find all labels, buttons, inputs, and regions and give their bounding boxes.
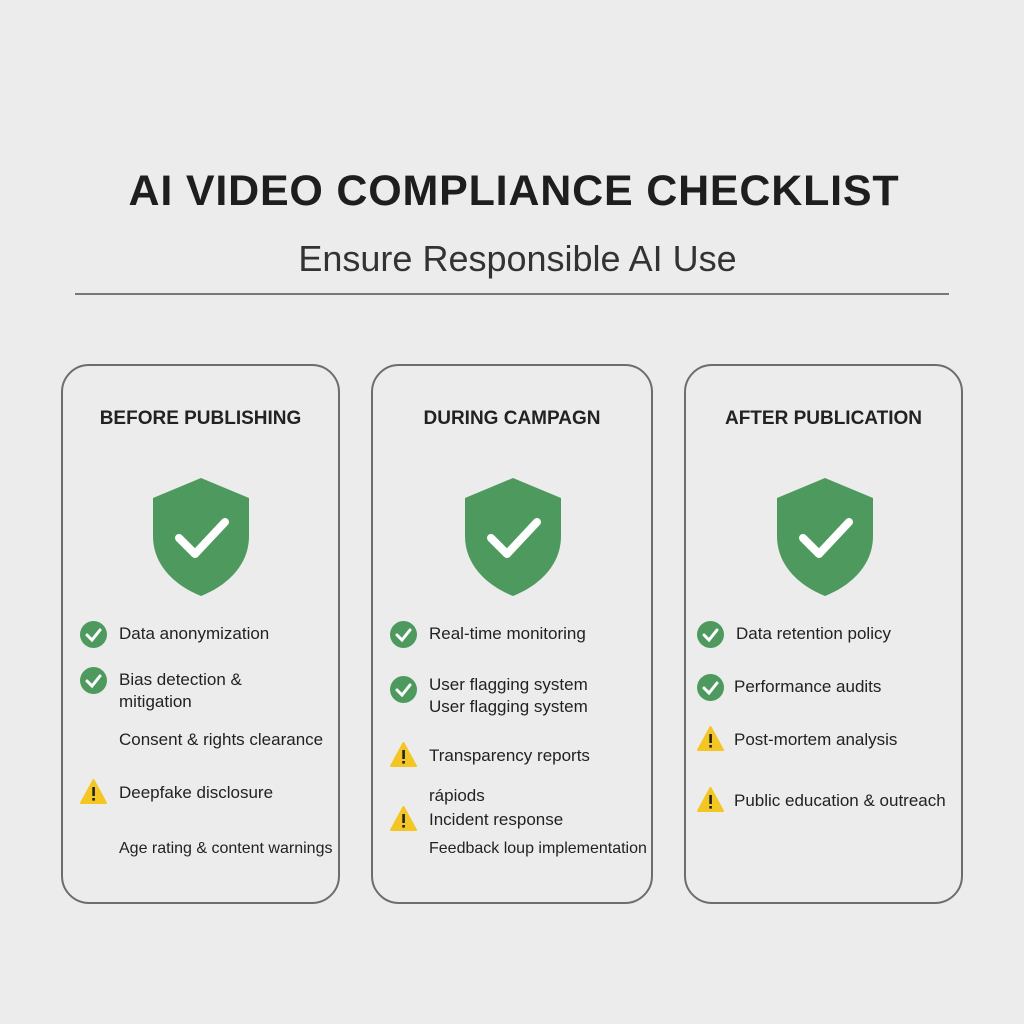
icon: shield (465, 478, 561, 596)
item (80, 779, 273, 804)
panel: before publishing (61, 364, 340, 904)
icon: shield (777, 478, 873, 596)
item: Consent & rights clearance (119, 730, 323, 749)
item (390, 742, 590, 767)
heading: AFTER PUBLICATION (725, 408, 922, 429)
panel: after publication (684, 364, 963, 904)
panel: after publication: Performance audits (734, 677, 881, 696)
panel: after publication: Post-mortem analysis (734, 730, 897, 749)
item (697, 787, 946, 812)
item (697, 674, 881, 701)
item: Feedback loup implementation (429, 840, 647, 857)
item (390, 786, 563, 831)
title: AI VIDEO COMPLIANCE CHECKLIST (129, 167, 899, 215)
panel: after publication: Data retention policy (736, 624, 891, 643)
panel: before publishing: mitigation (119, 692, 192, 711)
item (80, 621, 269, 648)
item (390, 621, 586, 648)
panel: during campaign: Incident response (429, 810, 563, 829)
item (80, 667, 242, 711)
panel: after publication: Public education & outreach (734, 791, 946, 810)
panel: during campaign: Real-time monitoring (429, 624, 586, 643)
panel: during campaign: User flagging system (429, 697, 588, 716)
panel: before publishing: Deepfake disclosure (119, 783, 273, 802)
item (697, 726, 897, 751)
icon: shield (153, 478, 249, 596)
panel: during campaign: rápiods (429, 786, 485, 805)
panel: before publishing: Bias detection & (119, 670, 242, 689)
panel: during campaign: User flagging system (429, 675, 588, 694)
heading: DURING CAMPAGN (424, 408, 600, 429)
item (390, 675, 588, 716)
item: Age rating & content warnings (119, 840, 332, 857)
heading: BEFORE PUBLISHING (100, 408, 301, 429)
panel: during campaign: Transparency reports (429, 746, 590, 765)
panel: before publishing: Data anonymization (119, 624, 269, 643)
item (697, 621, 891, 648)
subtitle: Ensure Responsible AI Use (298, 238, 737, 279)
panel: during campaign (371, 364, 653, 904)
